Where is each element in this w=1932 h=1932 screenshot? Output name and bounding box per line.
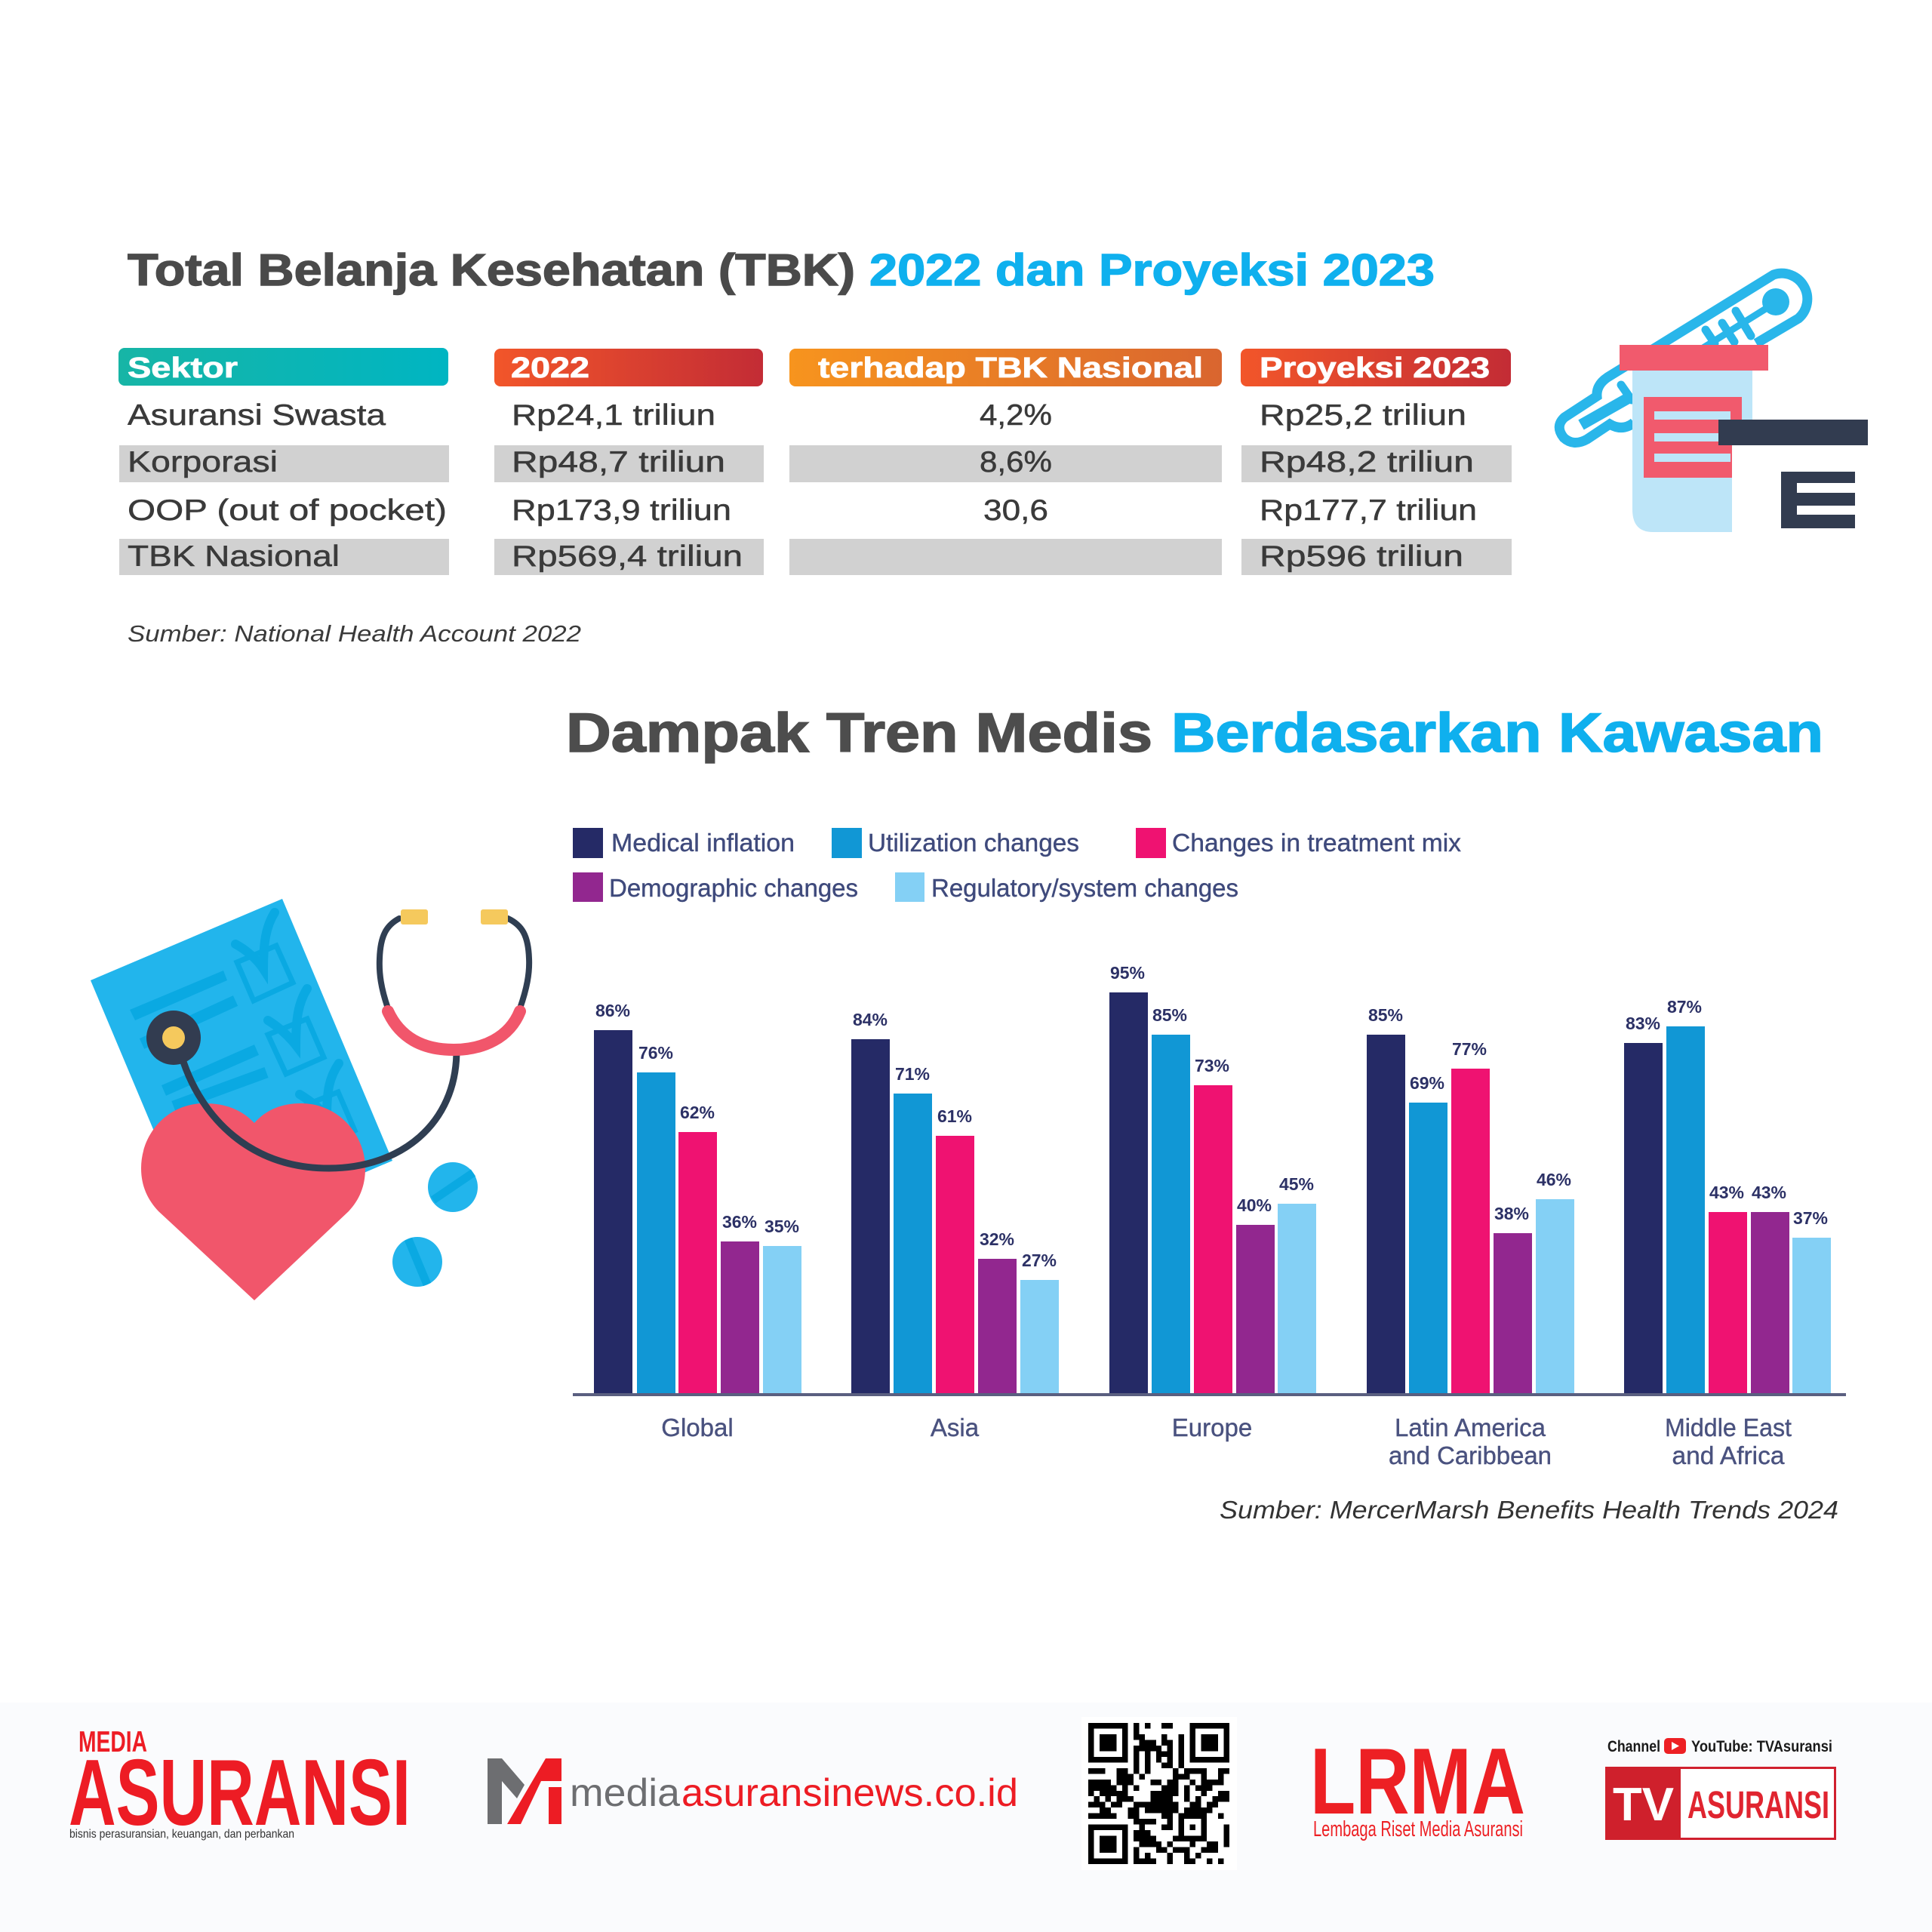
icon: bottle cap — [1620, 345, 1768, 371]
checklist paper — [91, 899, 392, 1242]
bar chart: medical trend impact by region — [573, 963, 1846, 1469]
table row: Korporasi — [128, 446, 1474, 478]
table row: Korporasi: Rp48,2 triliun — [1260, 446, 1474, 478]
legend: Changes in treatment mix: Changes in treatment mix — [1172, 829, 1461, 857]
heart — [141, 1103, 365, 1300]
table row: TBK Nasional: Rp596 triliun — [1260, 540, 1463, 573]
bars: Asia — [851, 1010, 1059, 1393]
axis labels — [661, 1414, 1792, 1469]
table row: TBK Nasional: Rp569,4 triliun — [512, 540, 743, 573]
table row: OOP: OOP (out of pocket) — [128, 494, 447, 527]
title: Dampak Tren Medis: Dampak Tren Medis — [566, 703, 1152, 764]
table header: Proyeksi 2023: Proyeksi 2023 — [1260, 352, 1490, 384]
table header: Sektor — [118, 348, 448, 386]
table row: Asuransi Swasta: 4,2% — [980, 399, 1052, 432]
logo: TV Asuransi — [1605, 1767, 1835, 1840]
axis labels: and Caribbean — [1389, 1441, 1552, 1469]
logo: M mark — [488, 1758, 561, 1824]
bars: Middle East and Africa: 43% — [1752, 1183, 1786, 1202]
logo: Media Asuransi: bisnis perasuransian, keuangan, dan perbankan — [69, 1828, 294, 1841]
axis labels: Global — [661, 1414, 734, 1441]
axis labels: Middle East — [1665, 1414, 1792, 1441]
table row: TBK Nasional — [128, 540, 1463, 573]
bars: Global — [594, 1001, 801, 1393]
bars: Latin America and Caribbean: 69% — [1410, 1073, 1444, 1093]
pill upper — [428, 1162, 478, 1212]
bars: Latin America and Caribbean: 77% — [1452, 1039, 1487, 1059]
legend: Demographic changes: Demographic changes — [609, 874, 858, 902]
bars: Latin America and Caribbean: 85% — [1368, 1005, 1403, 1025]
legend: Utilization changes: Utilization changes — [868, 829, 1079, 857]
logo: TV Asuransi: ASURANSI — [1687, 1783, 1829, 1826]
table row: Asuransi Swasta: Rp25,2 triliun — [1260, 399, 1466, 432]
panel: health spending table — [118, 348, 1512, 575]
icon: thermometer — [1559, 273, 1807, 443]
illustration: heart, stethoscope, checklist and pills — [91, 899, 529, 1300]
bars: Europe: 95% — [1110, 963, 1145, 983]
bars: Latin America and Caribbean: 46% — [1537, 1170, 1571, 1189]
icon: thermometer and bottle — [1559, 273, 1868, 532]
logo: LRMA: LRMA — [1310, 1730, 1525, 1834]
website: mediaasuransinews.co.id: media — [570, 1771, 680, 1815]
bars: Global: 76% — [638, 1043, 673, 1063]
legend: Medical inflation: Medical inflation — [611, 829, 795, 857]
bars: Global: 35% — [764, 1217, 799, 1236]
table header: 2022 — [494, 349, 763, 386]
bars: Middle East and Africa: 83% — [1626, 1014, 1660, 1033]
title: Total Belanja Kesehatan: Total Belanja Kesehatan (TBK) — [128, 245, 855, 295]
bars: Latin America and Caribbean: 38% — [1494, 1204, 1529, 1223]
chart legend — [573, 828, 1461, 902]
table row: OOP — [128, 494, 1477, 527]
bars: Europe: 73% — [1195, 1056, 1229, 1075]
axis labels: and Africa — [1672, 1441, 1785, 1469]
bars: Middle East and Africa: 37% — [1793, 1208, 1828, 1228]
logo: LRMA: Lembaga Riset Media Asuransi — [1313, 1817, 1523, 1841]
legend: Regulatory/system changes: Regulatory/system changes — [931, 874, 1238, 902]
table row: OOP: Rp173,9 triliun — [512, 494, 731, 527]
table row: Asuransi Swasta: Asuransi Swasta — [128, 399, 386, 432]
title: Dampak Tren Medis: Berdasarkan Kawasan — [1171, 703, 1823, 764]
icon: dark E block — [1781, 472, 1855, 528]
bars: Asia: 27% — [1022, 1251, 1057, 1270]
source note: MercerMarsh: Sumber: MercerMarsh Benefits Health Trends 2024 — [1220, 1496, 1838, 1524]
title: Total Belanja Kesehatan — [128, 245, 1435, 295]
bars: Middle East and Africa — [1624, 997, 1831, 1393]
bars: Middle East and Africa: 43% — [1709, 1183, 1744, 1202]
table row: TBK Nasional: TBK Nasional — [128, 540, 340, 573]
bars: Asia: 32% — [980, 1229, 1014, 1249]
bars: Asia: 84% — [853, 1010, 888, 1029]
logo: Media Asuransi: MEDIA — [78, 1726, 147, 1758]
bars: Europe: 45% — [1279, 1174, 1314, 1194]
YouTube channel line: Channel — [1607, 1738, 1660, 1755]
table header: terhadap TBK Nasional — [789, 349, 1222, 386]
YouTube channel line: YouTube: TVAsuransi — [1691, 1738, 1832, 1755]
QR code — [1081, 1717, 1237, 1870]
chart axis — [573, 1393, 1846, 1396]
bars: Global: 86% — [595, 1001, 630, 1020]
icon: YouTube play — [1664, 1738, 1686, 1754]
bars: Europe: 85% — [1152, 1005, 1187, 1025]
table row: OOP: Rp177,7 triliun — [1260, 494, 1477, 527]
bars: Europe: 40% — [1237, 1195, 1272, 1215]
bars: Asia: 61% — [937, 1106, 972, 1126]
source note: National Health Account: Sumber: National Health Account 2022 — [128, 620, 581, 647]
icon: bottle label — [1644, 397, 1742, 478]
icon: bottle body — [1632, 371, 1752, 532]
bars: Latin America and Caribbean — [1367, 1005, 1574, 1393]
table header: Proyeksi 2023 — [1241, 349, 1511, 386]
title: Total Belanja Kesehatan: 2022 dan Proyeksi 2023 — [869, 245, 1435, 295]
axis labels: Latin America — [1395, 1414, 1546, 1441]
title: Dampak Tren Medis — [566, 703, 1823, 764]
bars: Middle East and Africa: 87% — [1667, 997, 1702, 1017]
table row: OOP: 30,6 — [983, 494, 1048, 527]
pill lower — [392, 1237, 442, 1287]
bars: Global: 62% — [680, 1103, 715, 1122]
table header: 2022: 2022 — [511, 352, 589, 384]
bars: Asia: 71% — [895, 1064, 930, 1084]
axis labels: Asia — [931, 1414, 980, 1441]
table row: Korporasi: 8,6% — [980, 446, 1052, 478]
table row: Asuransi Swasta — [128, 399, 1466, 432]
table row: Korporasi: Korporasi — [128, 446, 278, 478]
logo: TV Asuransi: TV — [1613, 1779, 1674, 1831]
bars: Global: 36% — [722, 1212, 757, 1232]
table row: Korporasi: Rp48,7 triliun — [512, 446, 725, 478]
logo: Media Asuransi: ASURANSI — [69, 1741, 411, 1845]
icon: dark bar — [1718, 420, 1868, 445]
table header: terhadap TBK Nasional: terhadap TBK Nasional — [818, 352, 1203, 384]
table header: Sektor: Sektor — [128, 352, 238, 384]
stethoscope — [146, 909, 529, 1168]
website: mediaasuransinews.co.id: asuransinews.co.id — [681, 1771, 1018, 1815]
axis labels: Europe — [1172, 1414, 1252, 1441]
YouTube channel line — [1607, 1738, 1832, 1755]
table row: Asuransi Swasta: Rp24,1 triliun — [512, 399, 715, 432]
bars: Europe — [1109, 963, 1316, 1393]
footer band — [0, 1703, 1932, 1932]
logo: Media Asuransi — [69, 1726, 411, 1845]
